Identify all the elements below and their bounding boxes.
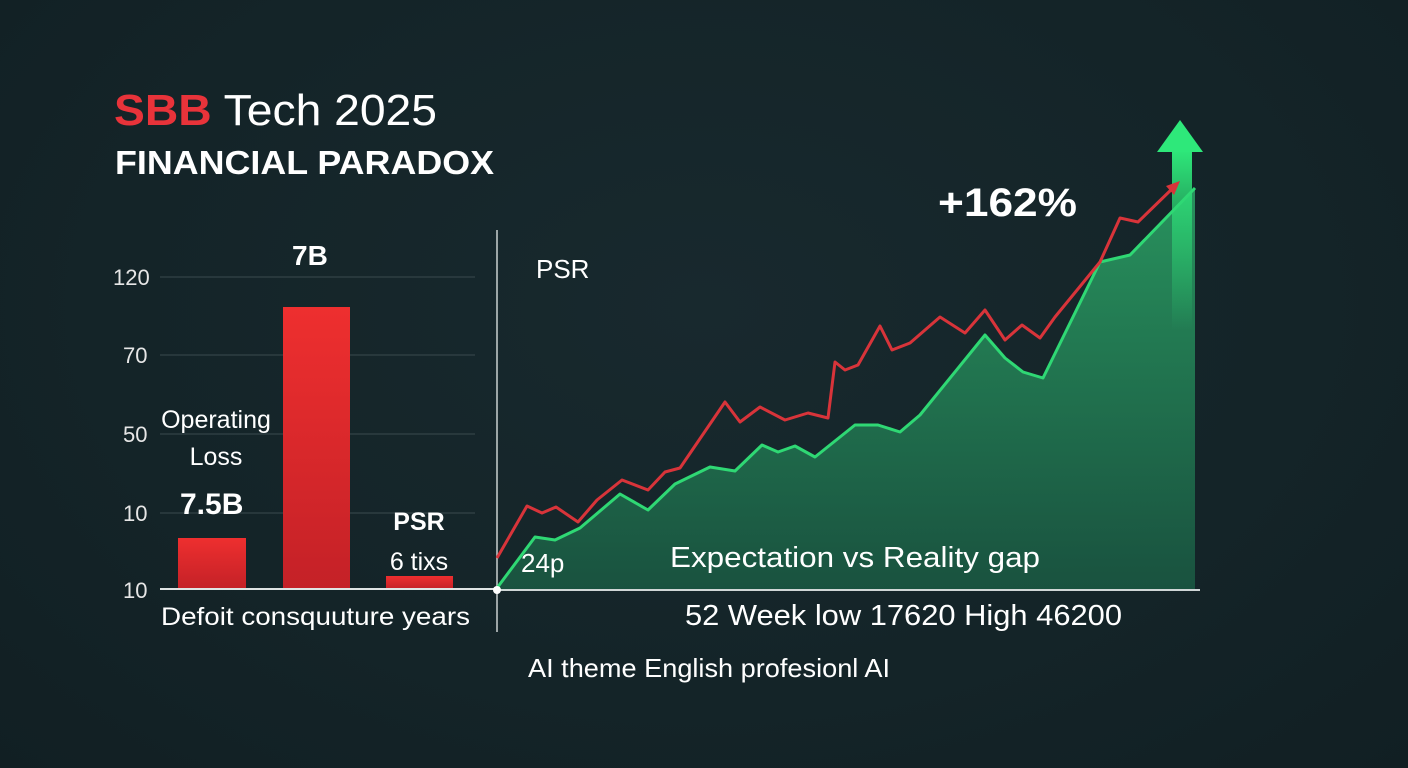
footer note: AI theme English profesionl AI	[528, 653, 890, 683]
bar chart: operating loss: Operating	[161, 406, 271, 434]
line chart: expectation vs reality	[493, 120, 1203, 632]
title	[114, 86, 494, 181]
bar chart: operating loss: PSR	[393, 508, 445, 536]
line chart: expectation vs reality: 24p	[521, 548, 564, 578]
bar chart: operating loss: Defoit consquuture years	[161, 603, 470, 631]
icon: green up arrow	[1157, 120, 1203, 330]
divider	[496, 230, 498, 632]
bar chart: operating loss: 6 tixs	[390, 548, 448, 576]
bar chart: operating loss: 70	[123, 343, 147, 368]
line chart: expectation vs reality: 52 Week low 17620 High 46200	[685, 600, 1122, 632]
bar chart: operating loss: 7B	[292, 240, 328, 271]
line chart: expectation vs reality: PSR	[536, 254, 589, 284]
bar chart: operating loss: Loss	[190, 443, 242, 471]
bar chart: operating loss: 10	[123, 578, 147, 603]
bar chart: operating loss: 120	[113, 265, 150, 290]
line chart: expectation vs reality: Expectation vs Reality gap	[670, 542, 1040, 574]
bar chart: operating loss: 50	[123, 422, 147, 447]
bar chart: operating loss	[113, 240, 497, 631]
title: FINANCIAL PARADOX	[115, 144, 494, 181]
bar chart: operating loss: 7.5B	[180, 488, 243, 521]
line chart: expectation vs reality: +162%	[938, 181, 1077, 225]
title: SBB Tech 2025	[114, 86, 437, 135]
bar chart: operating loss: 10	[123, 501, 147, 526]
